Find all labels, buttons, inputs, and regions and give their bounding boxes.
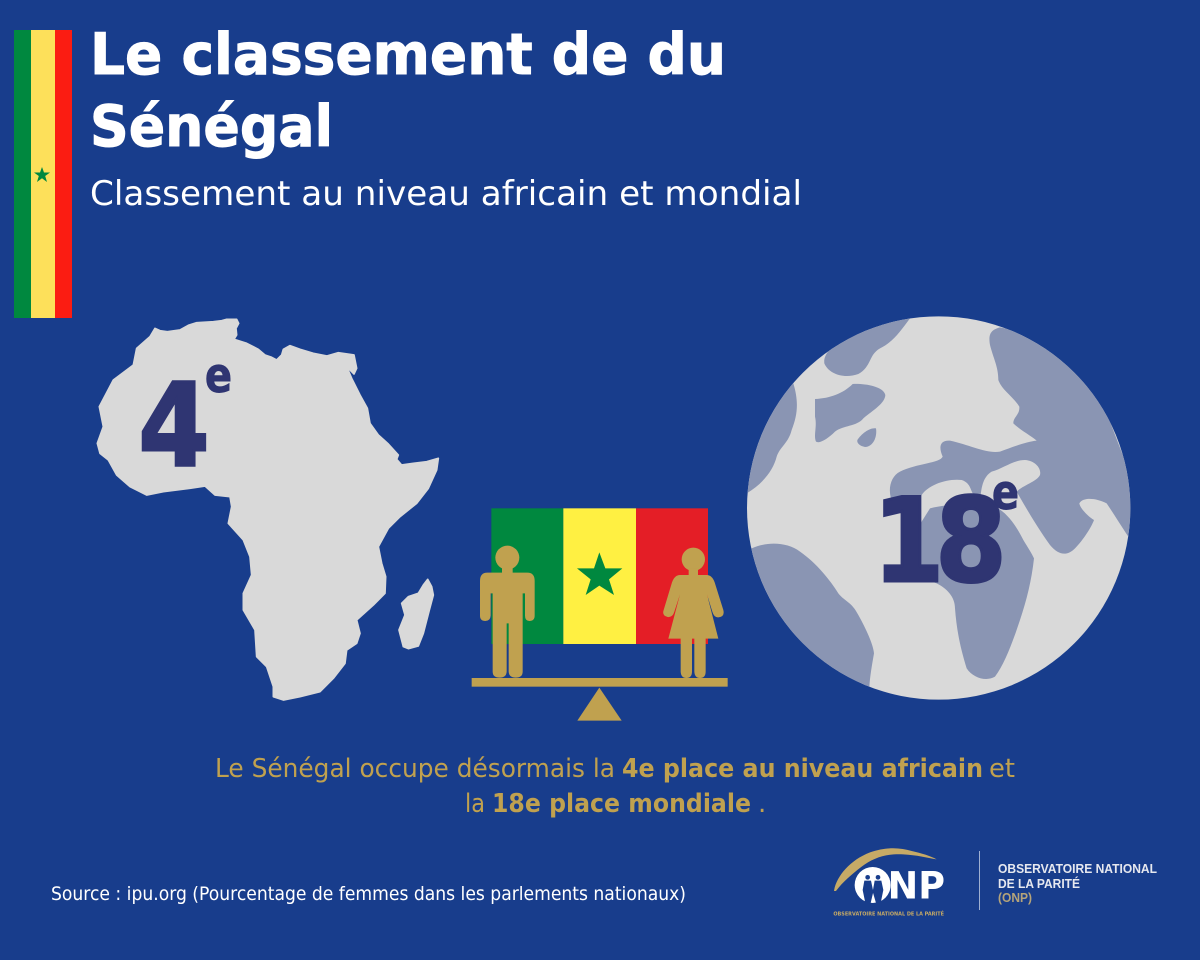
logo circle with figures xyxy=(855,867,891,903)
title xyxy=(90,22,726,160)
map: Africa xyxy=(97,319,438,700)
map: Africa on globe xyxy=(921,506,1034,679)
text: summary: 4e place au niveau africain xyxy=(622,754,983,784)
text: summary: et xyxy=(989,754,1015,784)
text: summary: la xyxy=(465,789,485,819)
source: Source : ipu.org (Pourcentage de femmes dans les parlements nationaux) xyxy=(51,883,686,905)
logo mark xyxy=(833,848,945,917)
rank: 18e: e xyxy=(992,465,1019,521)
text: summary xyxy=(215,754,1015,819)
panel: world ranking xyxy=(740,316,1140,700)
icon: balance beam xyxy=(472,678,728,687)
rank: 4e: 4 xyxy=(138,359,210,492)
subtitle: Classement au niveau africain et mondial xyxy=(90,174,802,214)
logo arc xyxy=(834,848,937,891)
logo name: OBSERVATOIRE NATIONAL xyxy=(998,862,1157,876)
icon: woman xyxy=(663,548,724,678)
title: Le classement de du xyxy=(90,22,726,88)
logo: ONP xyxy=(833,848,1157,917)
text: summary: . xyxy=(758,789,766,819)
icon: man xyxy=(480,546,535,678)
rank: 4e: e xyxy=(205,348,232,404)
rank: 18e: 18 xyxy=(873,474,1007,609)
logo letters: NP xyxy=(888,863,945,907)
panel: Africa ranking xyxy=(97,319,438,700)
text: summary: 18e place mondiale xyxy=(492,789,751,819)
logo caption: OBSERVATOIRE NATIONAL DE LA PARITÉ xyxy=(833,909,945,917)
logo divider xyxy=(979,851,980,910)
logo name: DE LA PARITÉ xyxy=(998,876,1080,891)
title: Sénégal xyxy=(90,94,333,160)
icon: vertical Senegal flag xyxy=(14,30,72,318)
icon: parity scale with flag xyxy=(472,508,728,721)
icon: balance pivot xyxy=(577,688,622,721)
logo name xyxy=(998,862,1157,905)
icon: Senegal flag xyxy=(491,508,708,644)
text: summary: Le Sénégal occupe désormais la xyxy=(215,754,615,784)
map: Europe and Asia xyxy=(890,327,1140,554)
logo name: (ONP) xyxy=(998,891,1032,905)
map: globe xyxy=(740,316,1140,700)
